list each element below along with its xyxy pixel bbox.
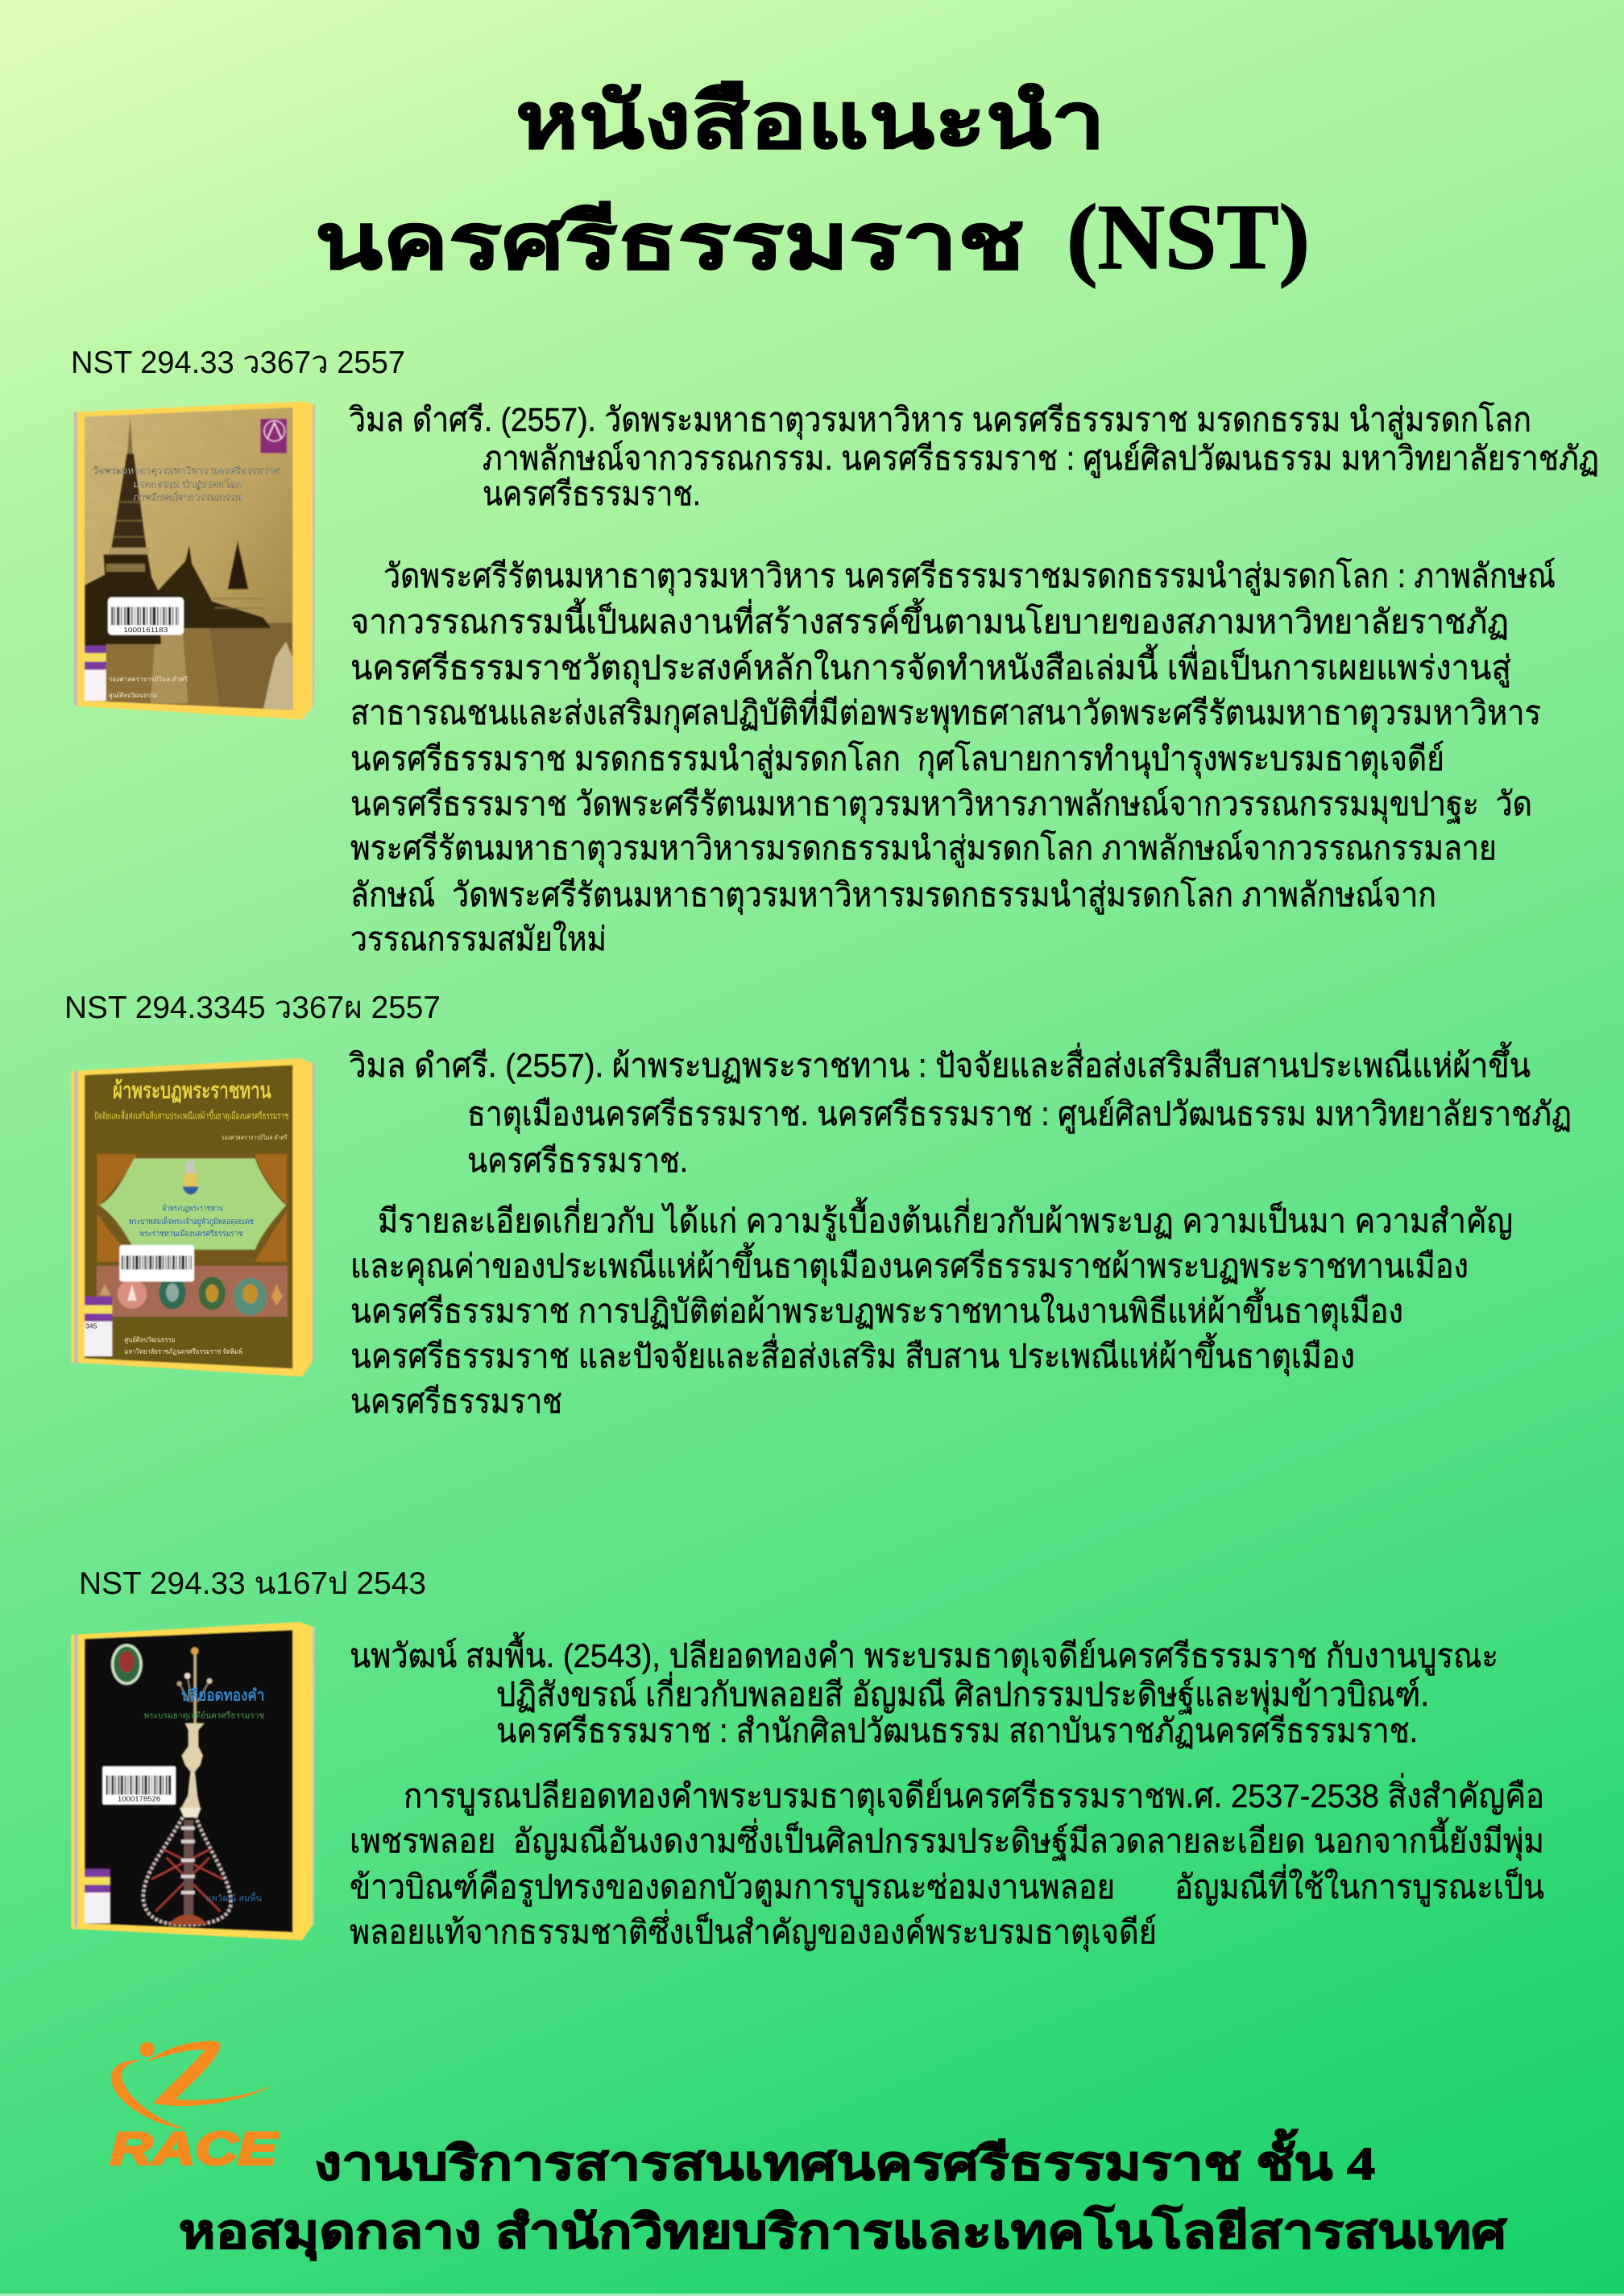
logo: RACE [110,2041,279,2175]
cover title text: วัดพระมหาธาตุวรมหาวิหาร นครศรีธรรมราช [93,465,280,477]
citation: book 3: นครศรีธรรมราช : สำนักศิลปวัฒนธรรม สถาบันราชภัฏนครศรีธรรมราช. [496,1712,1418,1749]
footer: service location [179,2129,1507,2261]
citation: book 3 [350,1632,1498,1749]
cover title text: ปลียอดทองคำ [181,1687,264,1705]
summary: book 3 [350,1773,1544,1952]
cover title text: มรดกธรรม นำสู่มรดกโลก [133,479,242,491]
summary: book 2: นครศรีธรรมราช [350,1383,562,1420]
citation: book 2: นครศรีธรรมราช. [467,1142,688,1179]
summary: book 3: พลอยแท้จากธรรมชาติซึ่งเป็นสำคัญขององค์พระบรมธาตุเจดีย์ [350,1909,1157,1952]
logo: RACE: RACE [110,2124,279,2175]
cover title text: ศูนย์ศิลปวัฒนธรรม [109,691,157,700]
cover title text: พระบาทสมเด็จพระเจ้าอยู่หัวภูมิพลอดุลยเดช [129,1215,254,1227]
cover title text: นพวัฒน์ สมพื้น [205,1892,263,1904]
cover title text [85,1078,288,1355]
title [315,78,1310,288]
citation: book 3: นพวัฒน์ สมพื้น. (2543), ปลียอดทองคำ พระบรมธาตุเจดีย์นครศรีธรรมราช กับงานบูรณะ [350,1632,1498,1676]
summary: book 1: นครศรีธรรมราช วัดพระศรีรัตนมหาธาตุวรมหาวิหารภาพลักษณ์จากวรรณกรรมมุขปาฐะ วัด [350,785,1532,824]
summary: book 1: ลักษณ์ วัดพระศรีรัตนมหาธาตุวรมหาวิหารมรดกธรรมนำสู่มรดกโลก ภาพลักษณ์จาก [350,876,1436,915]
cover title text: ปัจจัยและสื่อส่งเสริมสืบสานประเพณีแห่ผ้าขึ้นธาตุเมืองนครศรีธรรมราช [94,1108,288,1122]
cover title text: 345 [85,1322,97,1330]
summary: book 1 [350,557,1556,958]
cover title text: รองศาสตราจารย์วิมล ดำศรี [109,675,188,683]
summary: book 1: สาธารณชนและส่งเสริมกุศลปฏิบัติที่มีต่อพระพุทธศาสนาวัดพระศรีรัตนมหาธาตุวรมหาวิหาร [350,690,1541,733]
citation: book 2 [349,1041,1572,1179]
title: นครศรีธรรมราช [315,199,1025,285]
call number: book 2: NST 294.3345 ว367ผ 2557 [64,991,441,1025]
summary: book 2: นครศรีธรรมราช การปฏิบัติต่อผ้าพระบฏพระราชทานในงานพิธีแห่ผ้าขึ้นธาตุเมือง [350,1287,1403,1331]
citation: book 2: วิมล ดำศรี. (2557). ผ้าพระบฏพระราชทาน : ปัจจัยและสื่อส่งเสริมสืบสานประเพณีแห่ผ้าขึ้น [349,1041,1531,1084]
summary: book 1: นครศรีธรรมราชวัตถุประสงค์หลักในการจัดทำหนังสือเล่มนี้ เพื่อเป็นการเผยแพร่งานสู่ [350,643,1511,688]
footer: service location: งานบริการสารสนเทศนครศรีธรรมราช ชั้น 4 [314,2129,1375,2190]
cover title text [118,1687,264,1904]
summary: book 1: นครศรีธรรมราช มรดกธรรมนำสู่มรดกโลก กุศโลบายการทำนุบำรุงพระบรมธาตุเจดีย์ [350,740,1444,779]
cover title text: พระราชทานเมืองนครศรีธรรมราช [139,1229,243,1239]
title: (NST) [1067,186,1310,288]
summary: book 2: นครศรีธรรมราช และปัจจัยและสื่อส่งเสริม สืบสาน ประเพณีแห่ผ้าขึ้นธาตุเมือง [350,1332,1355,1376]
cover title text [93,465,280,700]
summary: book 2 [350,1197,1513,1420]
cover title text: ผ้าพระบฏพระราชทาน [163,1203,223,1213]
summary: book 1: วรรณกรรมสมัยใหม่ [350,920,607,958]
summary: book 1: จากวรรณกรรมนี้เป็นผลงานที่สร้างสรรค์ขึ้นตามนโยบายของสภามหาวิทยาลัยราชภัฏ [350,598,1509,640]
cover title text: รองศาสตราจารย์วิมล ดำศรี [222,1133,288,1141]
title: หนังสือแนะนำ [516,78,1105,164]
citation: book 3: ปฏิสังขรณ์ เกี่ยวกับพลอยสี อัญมณี ศิลปกรรมประดิษฐ์และพุ่มข้าวบิณฑ์. [496,1672,1429,1715]
cover title text: ภาพลักษณ์จากวรรณกรรม [133,492,242,503]
summary: book 1: พระศรีรัตนมหาธาตุวรมหาวิหารมรดกธรรมนำสู่มรดกโลก ภาพลักษณ์จากวรรณกรรมลาย [350,829,1497,868]
footer: service location: หอสมุดกลาง สำนักวิทยบริการและเทคโนโลยีสารสนเทศ [179,2203,1507,2261]
summary: book 3: การบูรณปลียอดทองคำพระบรมธาตุเจดีย์นครศรีธรรมราชพ.ศ. 2537-2538 สิ่งสำคัญคือ [404,1773,1544,1816]
cover title text: มหาวิทยาลัยราชภัฏนครศรีธรรมราช จัดพิมพ์ [124,1347,242,1355]
cover title text: 1000178526 [118,1795,161,1803]
book cover: Pli Yot Thong Kham [71,1622,315,1940]
summary: book 3: ข้าวบิณฑ์คือรูปทรงของดอกบัวตูมการบูรณะซ่อมงานพลอย อัญมณีที่ใช้ในการบูรณะเป็น [350,1864,1544,1907]
summary: book 2: มีรายละเอียดเกี่ยวกับ ได้แก่ ความรู้เบื้องต้นเกี่ยวกับผ้าพระบฏ ความเป็นมา ความสำคัญ [378,1197,1513,1241]
citation: book 1: นครศรีธรรมราช. [483,475,701,512]
call number: book 3: NST 294.33 น167ป 2543 [79,1566,426,1601]
cover title text: ผ้าพระบฏพระราชทาน [113,1078,271,1103]
cover title text: ศูนย์ศิลปวัฒนธรรม [124,1336,176,1345]
cover title text: 1000161183 [123,626,168,634]
citation: book 1: วิมล ดำศรี. (2557). วัดพระมหาธาตุวรมหาวิหาร นครศรีธรรมราช มรดกธรรม นำสู่มรดกโลก [349,401,1531,440]
call number: book 1: NST 294.33 ว367ว 2557 [71,345,405,380]
book cover: Wat Phra Mahathat [74,401,315,719]
cover title text: พระบรมธาตุเจดีย์นครศรีธรรมราช [143,1710,264,1720]
summary: book 3: เพชรพลอย อัญมณีอันงดงามซึ่งเป็นศิลปกรรมประดิษฐ์มีลวดลายละเอียด นอกจากนี้ยังมีพุ่ม [350,1817,1544,1861]
book cover: Pha Phra Bot [71,1058,315,1376]
citation: book 1 [349,401,1599,512]
summary: book 2: และคุณค่าของประเพณีแห่ผ้าขึ้นธาตุเมืองนครศรีธรรมราชผ้าพระบฏพระราชทานเมือง [350,1242,1469,1286]
